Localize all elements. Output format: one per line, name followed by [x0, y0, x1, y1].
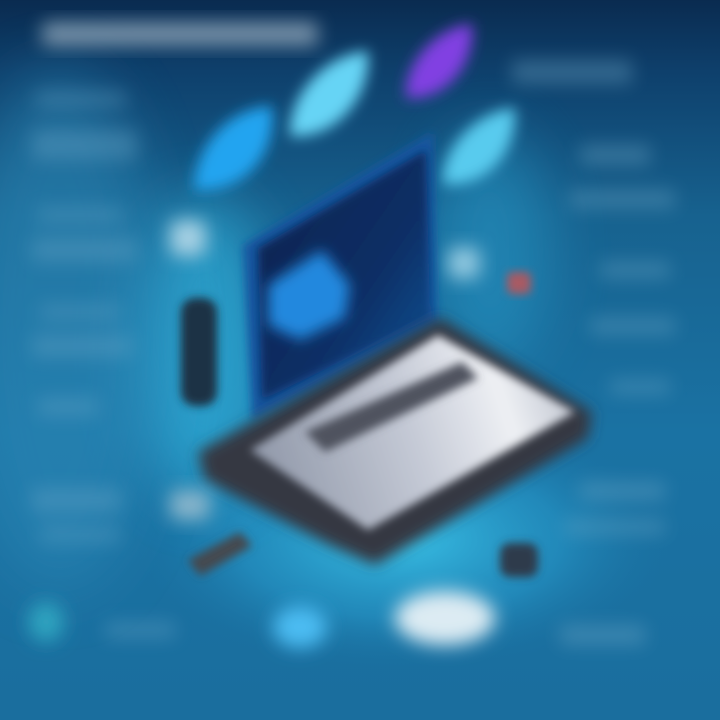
icon: red marker: [507, 272, 531, 294]
screen window: [268, 250, 350, 340]
icon: white cloud bottom: [395, 591, 495, 645]
laptop base shadow: [198, 318, 592, 565]
left column text blocks: [32, 92, 175, 638]
icon: pale chip lower left: [170, 490, 210, 520]
laptop screen: [243, 132, 437, 420]
icon: dark round tile: [500, 543, 538, 577]
icon: blue leaf: [194, 106, 273, 190]
laptop deck: [250, 335, 575, 530]
icon: bright blue shape bottom: [273, 606, 327, 648]
icon: light cyan leaf: [290, 51, 368, 136]
title bar: [42, 22, 318, 46]
icon: cyan leaf right: [443, 108, 515, 184]
icon: teal mark lower left: [28, 602, 64, 642]
laptop: [198, 132, 592, 565]
icon: small pale tile right: [448, 247, 480, 279]
icon: small pale tile left: [170, 220, 206, 256]
keyboard: [305, 362, 478, 452]
background glow: [0, 70, 670, 670]
icon: dark device: [181, 298, 217, 406]
icon: purple leaf: [406, 24, 472, 98]
icon: dark brown pill: [188, 532, 252, 576]
right column text blocks: [512, 60, 675, 645]
